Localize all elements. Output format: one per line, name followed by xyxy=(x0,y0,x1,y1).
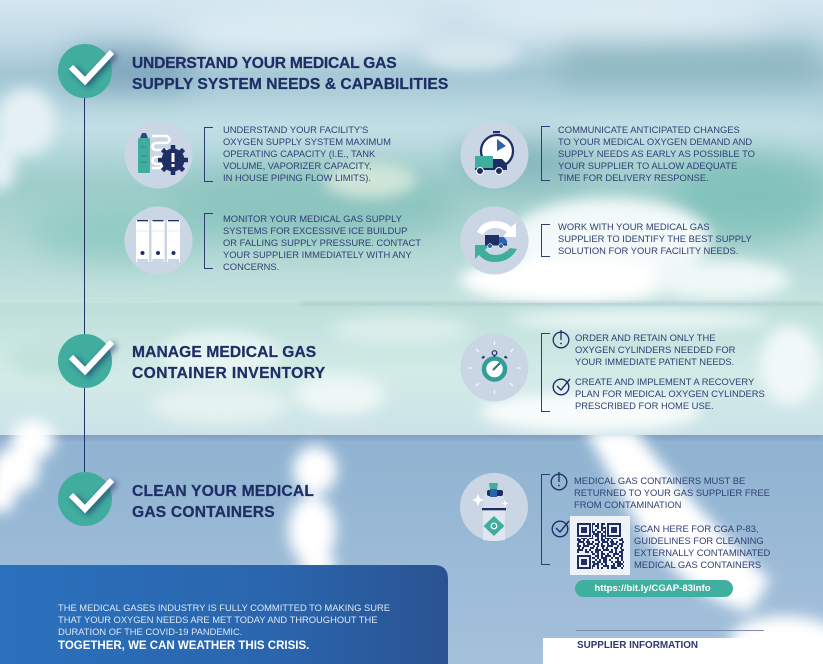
text block: monitor: SYSTEMS FOR EXCESSIVE ICE BUILDUP xyxy=(223,225,407,236)
supplier information label: SUPPLIER INFORMATION xyxy=(577,640,698,651)
text block: monitor: OR FALLING SUPPLY PRESSURE. CONTACT xyxy=(223,237,421,248)
text: recovery plan: CREATE AND IMPLEMENT A RECOVERY xyxy=(575,376,754,387)
footer body text: DURATION OF THE COVID-19 PANDEMIC. xyxy=(58,627,242,637)
text block: work with supplier xyxy=(541,221,752,257)
heading 3: CLEAN YOUR MEDICAL xyxy=(132,483,314,500)
footer body text: THAT YOUR OXYGEN NEEDS ARE MET TODAY AND THROUGHOUT THE xyxy=(58,615,377,625)
text: containers returned: MEDICAL GAS CONTAINERS MUST BE xyxy=(574,475,745,486)
timeline vertical line xyxy=(84,90,85,490)
heading 2: MANAGE MEDICAL GAS xyxy=(132,344,316,361)
link pill xyxy=(575,580,733,597)
heading 2 xyxy=(132,344,326,382)
text block: work with supplier: SUPPLIER TO IDENTIFY THE BEST SUPPLY xyxy=(558,233,752,244)
text block: communicate: SUPPLY NEEDS AS EARLY AS POSSIBLE TO xyxy=(558,148,755,159)
badge: check 2 xyxy=(58,334,120,388)
text block: communicate xyxy=(541,124,755,183)
text block: capacity: UNDERSTAND YOUR FACILITY'S xyxy=(223,124,368,135)
panel: container cleaning xyxy=(541,472,770,575)
footer body text: THE MEDICAL GASES INDUSTRY IS FULLY COMMITTED TO MAKING SURE xyxy=(58,603,390,613)
text: scan here: EXTERNALLY CONTAMINATED xyxy=(634,547,770,558)
text block: work with supplier: SOLUTION FOR YOUR FACILITY NEEDS. xyxy=(558,245,738,256)
text: scan here: GUIDELINES FOR CLEANING xyxy=(634,535,764,546)
text block: capacity: OXYGEN SUPPLY SYSTEM MAXIMUM xyxy=(223,136,391,147)
text block: communicate: COMMUNICATE ANTICIPATED CHANGES xyxy=(558,124,740,135)
text: scan here: SCAN HERE FOR CGA P-83, xyxy=(634,523,759,534)
footer message xyxy=(58,603,390,652)
text: order and retain: YOUR IMMEDIATE PATIENT NEEDS. xyxy=(575,356,734,367)
text block: monitor: MONITOR YOUR MEDICAL GAS SUPPLY xyxy=(223,213,402,224)
text: order and retain: ORDER AND RETAIN ONLY THE xyxy=(575,332,715,343)
heading 1: SUPPLY SYSTEM NEEDS & CAPABILITIES xyxy=(132,76,448,93)
text block: capacity: VOLUME, VAPORIZER CAPACITY, xyxy=(223,160,371,171)
supplier divider xyxy=(576,630,764,631)
text: order and retain: OXYGEN CYLINDERS NEEDED FOR xyxy=(575,344,735,355)
icon: stopwatch and truck xyxy=(460,120,528,188)
icon: storage tanks xyxy=(124,206,192,274)
text: containers returned: FROM CONTAMINATION xyxy=(574,499,681,510)
heading 3 xyxy=(132,483,314,521)
text block: monitor: YOUR SUPPLIER IMMEDIATELY WITH ANY xyxy=(223,249,412,260)
icon: alert clock xyxy=(552,330,570,348)
text block: monitor: CONCERNS. xyxy=(223,261,279,272)
text: order and retain xyxy=(575,332,735,367)
panel: inventory actions xyxy=(541,330,765,412)
text block: monitor xyxy=(204,213,421,272)
text block: communicate: TIME FOR DELIVERY RESPONSE. xyxy=(558,172,709,183)
text block: communicate: YOUR SUPPLIER TO ALLOW ADEQUATE xyxy=(558,160,737,171)
icon: recycle truck xyxy=(460,206,528,274)
QR code xyxy=(570,516,630,575)
icon: check circle xyxy=(552,520,570,538)
badge: check 1 xyxy=(58,44,120,98)
footer body text xyxy=(58,603,390,637)
icon: timer xyxy=(460,334,528,402)
text block: capacity: OPERATING CAPACITY (I.E., TANK xyxy=(223,148,375,159)
text block: work with supplier: WORK WITH YOUR MEDICAL GAS xyxy=(558,221,710,232)
text: containers returned: RETURNED TO YOUR GAS SUPPLIER FREE xyxy=(574,487,770,498)
icon: cylinder and gear xyxy=(124,120,192,188)
heading 2: CONTAINER INVENTORY xyxy=(132,365,326,382)
icon: alert clock xyxy=(550,472,568,490)
text: scan here xyxy=(634,523,770,570)
text: recovery plan: PRESCRIBED FOR HOME USE. xyxy=(575,400,714,411)
text: recovery plan: PLAN FOR MEDICAL OXYGEN CYLINDERS xyxy=(575,388,765,399)
left bokeh blobs crossing bands xyxy=(0,420,55,513)
heading 3: GAS CONTAINERS xyxy=(132,504,275,521)
heading 1: UNDERSTAND YOUR MEDICAL GAS xyxy=(132,55,396,72)
text: recovery plan xyxy=(575,376,765,411)
text: containers returned xyxy=(574,475,770,510)
text block: capacity xyxy=(204,124,391,183)
text block: capacity: IN HOUSE PIPING FLOW LIMITS). xyxy=(223,172,371,183)
icon: check circle xyxy=(552,378,570,396)
text block: communicate: TO YOUR MEDICAL OXYGEN DEMAND AND xyxy=(558,136,752,147)
text: scan here: MEDICAL GAS CONTAINERS xyxy=(634,559,761,570)
badge: check 3 xyxy=(58,472,120,526)
link pill: https://bit.ly/CGAP-83Info xyxy=(594,583,711,594)
heading 1 xyxy=(132,55,448,93)
icon: clean cylinder xyxy=(460,473,528,541)
footer tagline: TOGETHER, WE CAN WEATHER THIS CRISIS. xyxy=(58,640,309,652)
